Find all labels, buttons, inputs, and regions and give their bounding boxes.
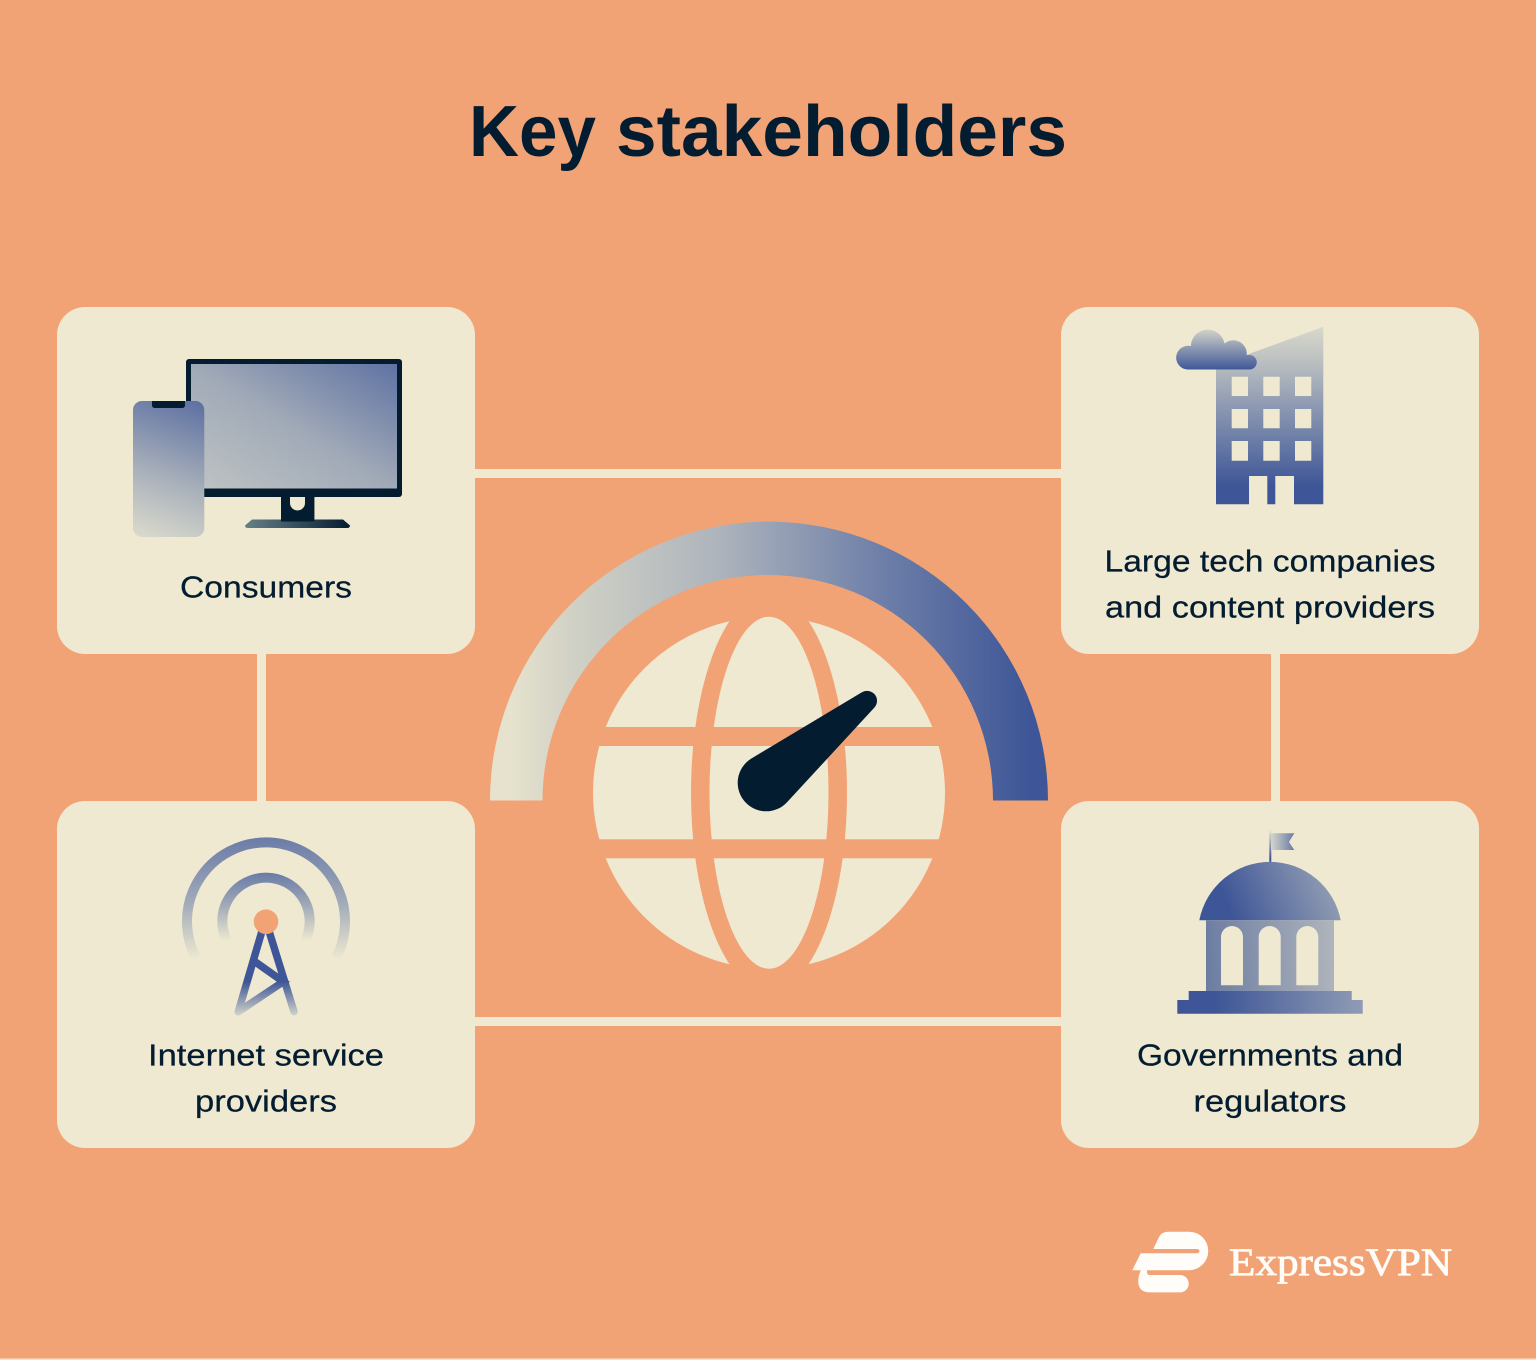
label: internet service providers: Internet service <box>148 1038 384 1072</box>
panel: large tech companies <box>1061 307 1479 654</box>
logo: ExpressVPN <box>1132 1232 1452 1292</box>
icon: globe <box>585 594 953 992</box>
label: large tech companies: Large tech companies <box>1104 544 1436 578</box>
label: governments and regulators: regulators <box>1194 1084 1346 1118</box>
connector lines <box>257 469 1280 1026</box>
panel: consumers <box>57 307 475 654</box>
title: Key <box>469 92 596 172</box>
title: stakeholders <box>616 92 1067 172</box>
icon: monitor and phone <box>133 359 402 537</box>
label: governments and regulators <box>1137 1038 1403 1118</box>
label: large tech companies <box>1104 544 1436 624</box>
icon: government dome building <box>1177 831 1363 1014</box>
label: large tech companies: and content providers <box>1105 590 1435 624</box>
label: internet service providers: providers <box>195 1084 337 1118</box>
label: governments and regulators: Governments and <box>1137 1038 1403 1072</box>
label: internet service providers <box>148 1038 384 1118</box>
icon: office building with cloud <box>1176 327 1323 504</box>
logo wordmark: ExpressVPN <box>1229 1241 1452 1284</box>
gauge arc <box>490 522 1048 800</box>
logo mark <box>1132 1232 1208 1292</box>
icon: radio tower <box>187 842 345 1012</box>
panel: internet service providers <box>57 801 475 1148</box>
speed gauge with globe <box>490 522 1048 992</box>
gauge needle <box>738 691 877 811</box>
panel: governments and regulators <box>1061 801 1479 1148</box>
label: consumers: Consumers <box>180 570 352 604</box>
